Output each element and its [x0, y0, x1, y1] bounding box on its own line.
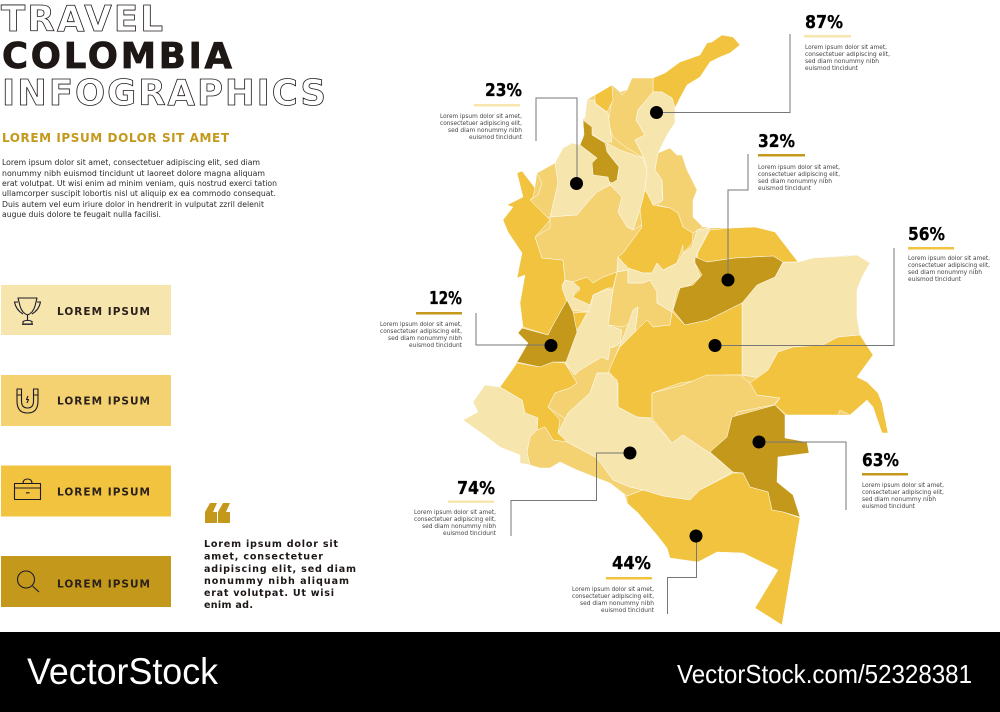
legend item: briefcase: LOREM IPSUM	[57, 486, 150, 498]
quote text: enim ad.	[204, 600, 253, 611]
country silhouette	[463, 35, 888, 625]
region: Putumayo	[527, 427, 643, 496]
title: INFOGRAPHICS	[2, 73, 326, 114]
callout: 32%: sed diam nonummy nibh	[758, 179, 832, 185]
callout: 63%	[752, 436, 944, 510]
callout: 56%: 56%	[908, 224, 945, 245]
intro text block: erat volutpat. Ut wisi enim ad minim veniam, quis nostrud exerci tation	[2, 179, 277, 188]
region: Guaviare	[652, 375, 780, 453]
legend item: magnet	[1, 375, 171, 426]
intro text block: Duis autem vel eum iriure dolor in hendrerit in vulputat zzril delenit	[2, 200, 264, 209]
intro text block: augue duis dolore te feugait nulla facilisi.	[2, 210, 161, 219]
region: Cundinamarca	[608, 270, 672, 332]
title: TRAVEL	[1, 0, 163, 40]
callout: 23%: consectetuer adipiscing elit,	[440, 121, 522, 127]
intro text block: nonummy nibh euismod tincidunt ut laoreet dolore magna aliquam	[2, 169, 265, 178]
icon: magnet	[17, 389, 38, 413]
region: Arauca	[697, 227, 798, 263]
region: Caldas	[572, 272, 617, 305]
callout: 44%: sed diam nonummy nibh	[580, 601, 654, 607]
region: Bogota strip	[620, 307, 638, 347]
legend item: magnifier	[1, 556, 171, 607]
callout: 23%: euismod tincidunt	[469, 135, 523, 141]
callout: 56%: sed diam nonummy nibh	[908, 270, 982, 276]
callout: 74%: Lorem ipsum dolor sit amet,	[414, 510, 496, 516]
callout: 44%: consectetuer adipiscing elit,	[572, 594, 654, 600]
callout: 63%: sed diam nonummy nibh	[862, 497, 936, 503]
subheading: LOREM IPSUM DOLOR SIT AMET	[2, 131, 230, 145]
callout: 12%: 12%	[429, 288, 462, 309]
callout: 32%	[722, 131, 840, 286]
callout: 12%: consectetuer adipiscing elit,	[380, 329, 462, 335]
region: Tolima	[565, 289, 622, 375]
region: La Guajira	[653, 35, 740, 108]
region: Valle	[517, 300, 577, 367]
quote text: amet, consectetuer	[204, 552, 323, 562]
callout: 87%: sed diam nonummy nibh	[805, 59, 879, 65]
legend item: magnet: LOREM IPSUM	[57, 396, 150, 408]
icon: trophy	[14, 298, 40, 324]
region: Boyaca	[617, 228, 710, 312]
region: Amazonas	[627, 473, 800, 625]
callout: 74%: 74%	[457, 478, 495, 499]
region: Meta	[608, 303, 742, 418]
callout: 87%: consectetuer adipiscing elit,	[805, 52, 890, 58]
callout: 74%: consectetuer adipiscing elit,	[414, 517, 496, 523]
callout: 87%: Lorem ipsum dolor sit amet,	[805, 45, 887, 51]
callout: 87%: euismod tincidunt	[805, 66, 859, 72]
callout: 23%: 23%	[485, 80, 522, 101]
region: Guainia	[750, 335, 888, 433]
callout: 56%: Lorem ipsum dolor sit amet,	[908, 256, 990, 262]
callout: 44%	[572, 530, 702, 614]
footer band: VectorStock	[27, 651, 218, 692]
intro text block: Lorem ipsum dolor sit amet, consectetuer adipiscing elit, sed diam	[2, 158, 260, 167]
intro text block	[2, 158, 277, 219]
callout: 87%: 87%	[805, 12, 843, 33]
callout: 63%: consectetuer adipiscing elit,	[862, 490, 944, 496]
callout: 12%: Lorem ipsum dolor sit amet,	[380, 322, 462, 328]
region: Vaupes	[710, 405, 809, 517]
region: Cesar	[635, 92, 675, 205]
quote text: erat volutpat. Ut wisi	[204, 588, 334, 599]
title: COLOMBIA	[2, 36, 233, 77]
region: Huila	[548, 345, 620, 420]
callout: 32%: Lorem ipsum dolor sit amet,	[758, 165, 840, 171]
callout: 12%	[380, 288, 558, 352]
region: Uraba	[530, 163, 558, 217]
footer band	[0, 632, 1000, 712]
callout: 87%	[650, 12, 890, 119]
region: Sucre	[580, 120, 619, 183]
callout: 44%: euismod tincidunt	[601, 608, 655, 614]
quote text: adipiscing elit, sed diam	[204, 564, 356, 575]
callout: 12%: euismod tincidunt	[409, 343, 463, 349]
map of Colombia	[463, 35, 888, 625]
callout: 44%: Lorem ipsum dolor sit amet,	[572, 587, 654, 593]
callout: 74%	[414, 446, 636, 537]
icon: magnifier	[18, 571, 39, 592]
callout: 56%	[708, 224, 990, 352]
icon: quotation mark	[205, 503, 230, 523]
legend item: trophy: LOREM IPSUM	[57, 306, 150, 318]
quote text: nonummy nibh aliquam	[204, 576, 349, 587]
callout: 32%: euismod tincidunt	[758, 186, 812, 192]
callout: 63%: Lorem ipsum dolor sit amet,	[862, 483, 944, 489]
callout: 32%: consectetuer adipiscing elit,	[758, 172, 840, 178]
region: Santander	[618, 190, 693, 273]
region: Caqueta	[558, 373, 733, 500]
icon: briefcase	[14, 479, 40, 500]
region: Choco	[503, 171, 567, 335]
region: Magdalena	[608, 78, 653, 158]
region: Bolivar north	[583, 100, 612, 142]
callout: 56%: euismod tincidunt	[908, 277, 962, 283]
callout: 74%: euismod tincidunt	[443, 531, 497, 537]
callout: 23%	[440, 80, 583, 190]
quote text: Lorem ipsum dolor sit	[204, 539, 338, 550]
region: Risaralda	[562, 280, 590, 312]
legend item: magnifier: LOREM IPSUM	[57, 578, 150, 590]
region: Quindio	[573, 312, 587, 332]
region: Narino	[463, 385, 538, 465]
region: Antioquia	[535, 185, 642, 283]
region: Cauca	[500, 362, 577, 442]
region: Vichada	[742, 255, 870, 378]
callout: 63%: euismod tincidunt	[862, 504, 916, 510]
legend item: trophy	[1, 285, 171, 335]
title	[1, 0, 326, 114]
quote text	[204, 539, 356, 611]
callout: 63%: 63%	[862, 450, 899, 471]
callout: 23%: Lorem ipsum dolor sit amet,	[440, 114, 522, 120]
callout: 23%: sed diam nonummy nibh	[448, 128, 522, 134]
footer band: VectorStock.com/52328381	[677, 659, 972, 689]
callout: 44%: 44%	[612, 553, 651, 574]
region: Cordoba	[550, 143, 610, 217]
region: Norte de Santander	[655, 148, 703, 233]
region: Atlantico	[595, 85, 613, 112]
region: Casanare	[673, 256, 783, 325]
region: Bolivar south	[607, 143, 647, 230]
callout: 74%: sed diam nonummy nibh	[422, 524, 496, 530]
intro text block: ullamcorper suscipit lobortis nisl ut aliquip ex ea commodo consequat.	[2, 189, 276, 198]
callout: 12%: sed diam nonummy nibh	[388, 336, 462, 342]
callout: 32%: 32%	[758, 131, 795, 152]
callout: 56%: consectetuer adipiscing elit,	[908, 263, 990, 269]
legend item: briefcase	[1, 466, 171, 516]
